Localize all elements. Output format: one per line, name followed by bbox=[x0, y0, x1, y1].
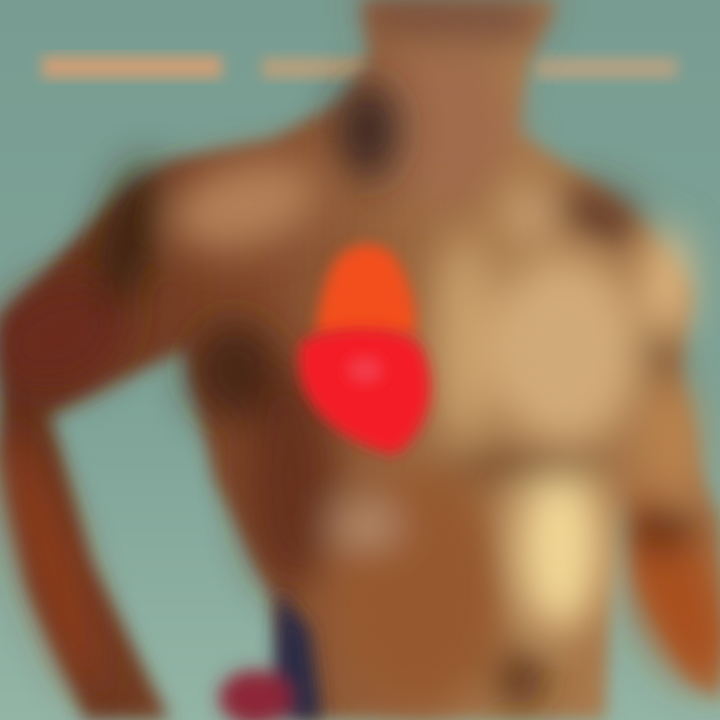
heart highlight bbox=[347, 356, 383, 384]
heart upper vessels bbox=[316, 245, 416, 335]
heart lower chamber bbox=[299, 328, 430, 455]
waistband bbox=[219, 590, 322, 720]
left shoulder and arm shading bbox=[0, 80, 398, 701]
neck bbox=[362, 0, 550, 210]
heart bbox=[299, 245, 430, 455]
title band bbox=[42, 56, 677, 78]
chest highlights bbox=[190, 173, 720, 710]
